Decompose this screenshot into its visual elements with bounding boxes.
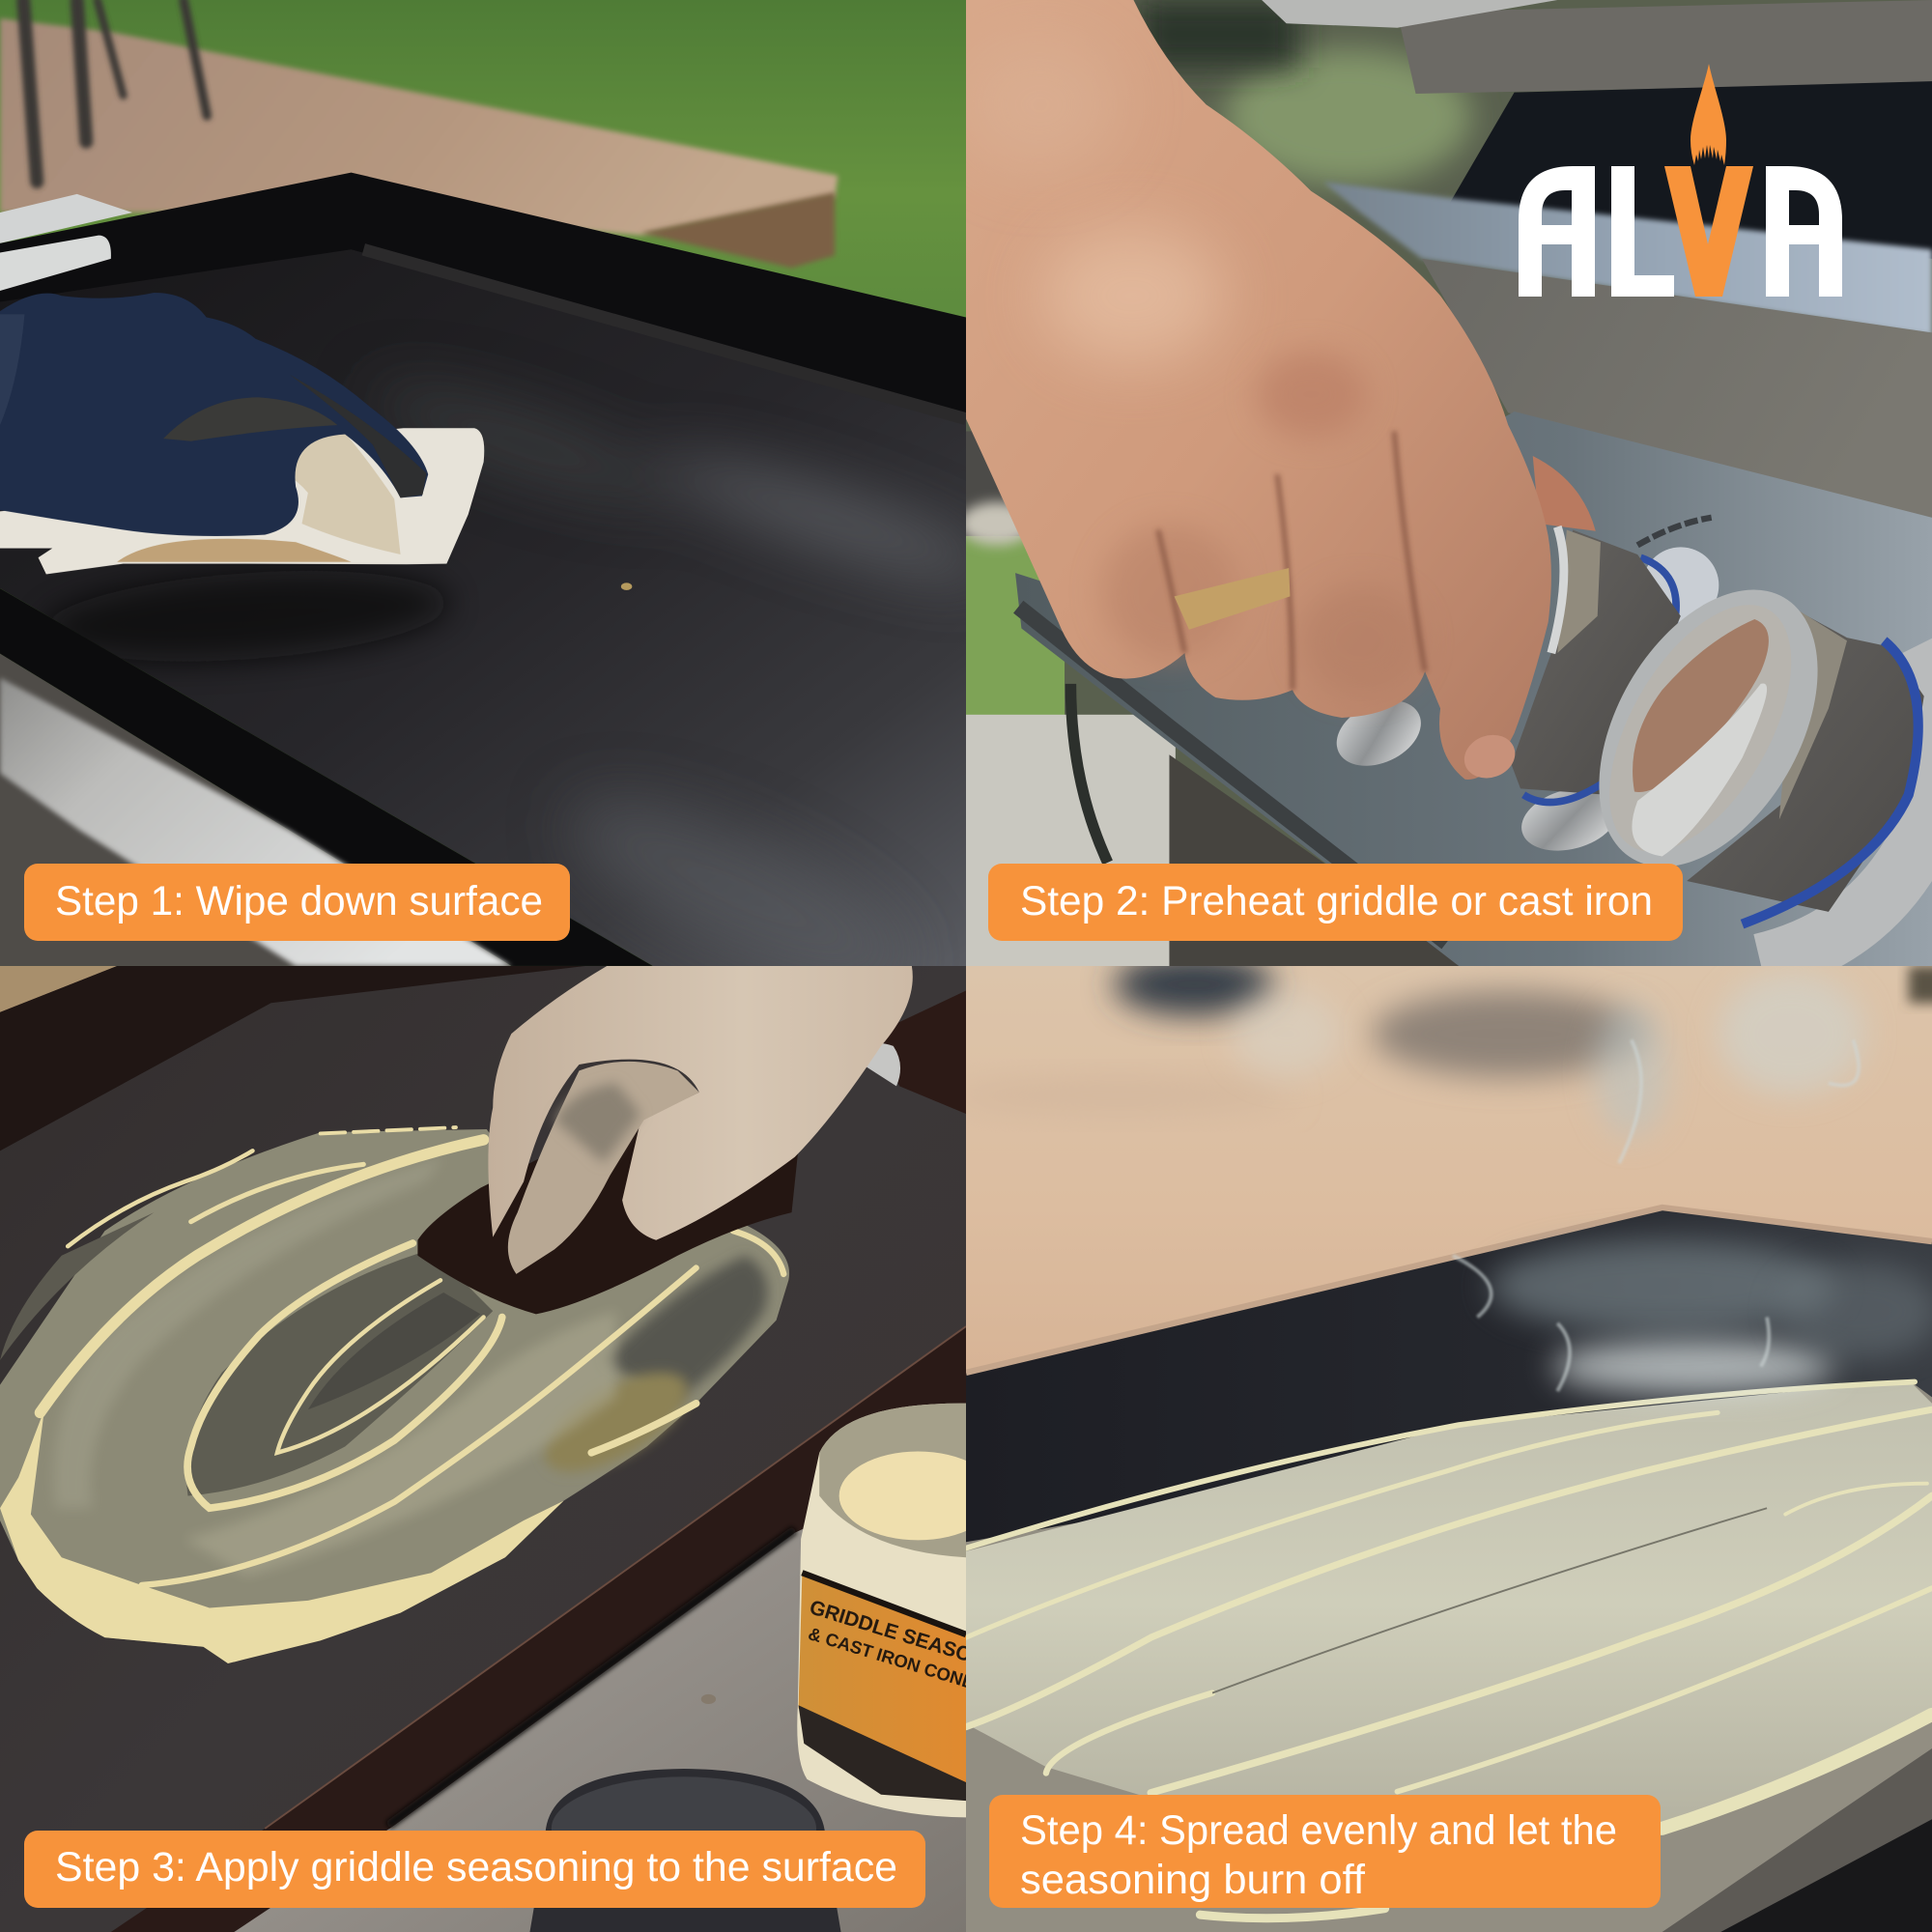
logo letter A: [1519, 166, 1595, 297]
griddle front lip: [0, 588, 653, 966]
seasoning coat: [966, 1380, 1932, 1829]
label: step 1: [24, 864, 570, 941]
panel: step 3 apply griddle seasoning photo: [0, 966, 998, 1932]
hand: [960, 0, 1596, 780]
grill cavity: [1450, 81, 1932, 259]
handle slot: [0, 236, 111, 291]
logo letter V: [1664, 166, 1753, 297]
main chrome knob: [1554, 552, 1932, 964]
blurred background objects: [948, 953, 1932, 1114]
seasoning jar lid: [529, 1769, 841, 1932]
griddle top rim: [0, 966, 585, 1151]
jar label text: GRIDDLE SEASON: [807, 1596, 988, 1671]
griddle front lip: [111, 1326, 966, 1932]
logo: ALVA: [1519, 64, 1842, 297]
label: step 4: [989, 1795, 1661, 1908]
griddle rim edge: [966, 1208, 1932, 1373]
griddle inner ledge: [363, 249, 966, 419]
counter top: [234, 1453, 966, 1932]
panel: step 2 preheat griddle knob photo: [960, 0, 1932, 966]
grill lid metal: [1262, 0, 1932, 94]
label: step 2: Step 2: Preheat griddle or cast iron: [1020, 878, 1653, 924]
lip shadow: [388, 1530, 795, 1826]
panel: step 1 wipe down surface photo: [0, 0, 997, 1022]
seasoning crack line: [1212, 1508, 1767, 1693]
lawn background: [0, 0, 966, 966]
griddle back wall: [0, 173, 966, 431]
wooden deck: [0, 18, 838, 268]
lawn, patio and concrete background: [960, 431, 1176, 966]
griddle surface ground: [966, 1380, 1932, 1932]
label: step 4: Step 4: Spread evenly and let the: [1020, 1807, 1617, 1854]
griddle seasoning jar: [797, 1404, 998, 1817]
panel: step 4 seasoning burn off photo: [948, 953, 1932, 1932]
label: step 3: Step 3: Apply griddle seasoning to the surface: [55, 1844, 897, 1890]
stainless steel body: [0, 654, 511, 966]
seasoning streaks: [966, 1381, 1932, 1918]
grill base cabinet: [1169, 754, 1471, 966]
control panel: [1015, 412, 1932, 966]
wedding ring: [1175, 568, 1290, 630]
griddle surface: [0, 966, 966, 1932]
label: step 1: Step 1: Wipe down surface: [55, 878, 543, 924]
seasoning thick bottom bead: [0, 1409, 564, 1663]
seasoning ridges: [40, 1127, 783, 1585]
patio chair legs: [23, 0, 207, 182]
rising smoke: [1231, 972, 1932, 1394]
seasoning smear: [0, 1129, 789, 1662]
logo letter A right: [1766, 166, 1842, 297]
thumb nail: [1459, 728, 1521, 785]
griddle back wall: [966, 1207, 1932, 1545]
front knob: [1511, 526, 1681, 803]
blurred garden background: [966, 0, 1932, 966]
logo flame: [1690, 64, 1726, 165]
control panel edge: [1018, 607, 1446, 943]
label: step 3: [24, 1831, 925, 1908]
logo letter L: [1611, 166, 1674, 297]
griddle speck: [701, 1694, 716, 1704]
grill front panel: [1422, 259, 1932, 518]
label: step 4: seasoning burn off: [1020, 1857, 1366, 1903]
griddle lower edge: [1662, 1748, 1932, 1932]
jar label subtext: & CAST IRON CONDITI: [806, 1623, 998, 1699]
griddle handle: [0, 194, 132, 243]
label: step 2: [988, 864, 1683, 941]
griddle debris speck: [621, 582, 632, 590]
navy glove: [0, 293, 428, 536]
rear knob base: [1326, 518, 1719, 861]
towel shadow: [41, 559, 452, 673]
grill lip highlight: [1323, 182, 1932, 336]
griddle cooking surface: [0, 249, 966, 966]
surface sheen: [394, 382, 966, 951]
dark rag: [417, 1093, 798, 1314]
blurred tan background: [966, 966, 1932, 1932]
grill cord: [1070, 684, 1108, 863]
work glove: [488, 966, 913, 1274]
cleaning towel: [0, 428, 484, 574]
griddle right rim and handle: [853, 991, 966, 1114]
